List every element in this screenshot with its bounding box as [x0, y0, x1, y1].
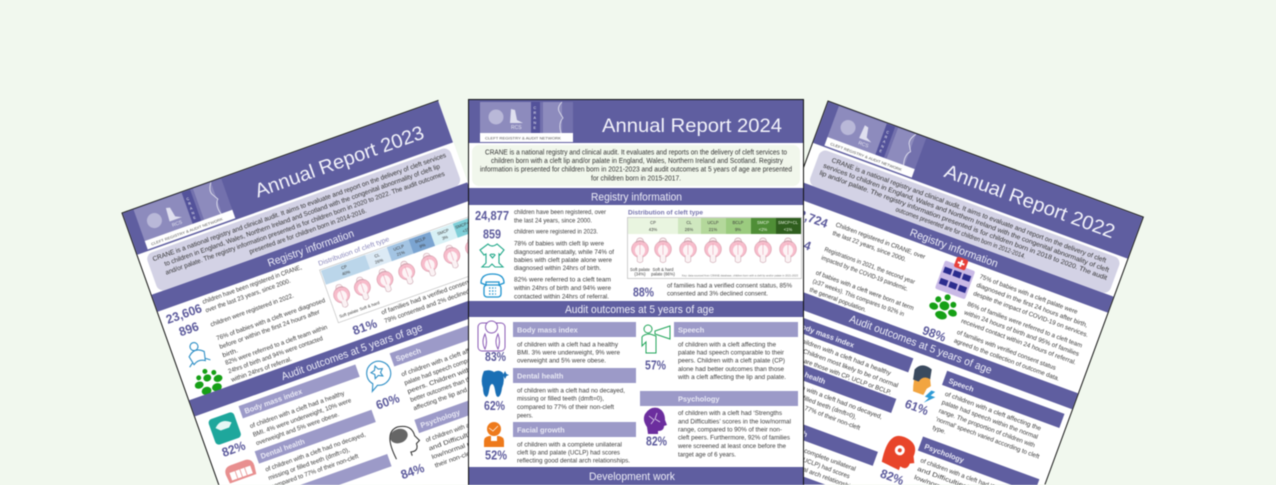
- stat 57%: 57%: [645, 358, 666, 372]
- registry stats right 2022: despite the impact of COVID-19 on services.: [972, 290, 1089, 339]
- psychology 2024: [640, 391, 798, 458]
- intro box 2024: [472, 145, 800, 186]
- intro box 2024: CRANE is a national registry and clinical audit. It evaluates and reports on the delivery of cleft services to: [485, 150, 787, 156]
- table: cleft types 2024: Key: data sourced from CRANE database, children born with a cleft lip and/or palate in 2021-2023: [682, 274, 799, 278]
- heading: distribution of cleft type 2024: Distribution of cleft type: [628, 210, 703, 216]
- table: cleft types 2024: BCLP: [733, 220, 744, 225]
- intro box 2022: services to children in England, Wales and Northern Ireland with the congenital abnormality of cleft: [822, 163, 1110, 274]
- facial growth 2024: cleft lip and palate (UCLP) had scores: [517, 450, 621, 456]
- psychology 2024: Psychology: [678, 394, 720, 404]
- speech 2024: of children with a cleft affecting the: [678, 342, 776, 348]
- psychology 2023: their non-cleft peers. Furthermore: [434, 429, 531, 469]
- table: cleft types 2024: CP: [650, 220, 656, 225]
- registry stats right 2022: 75% of babies with a cleft palate were: [978, 273, 1079, 316]
- icon: head with cog: [880, 432, 922, 474]
- body mass index 2022: [754, 305, 913, 400]
- body mass index 2022: Body mass index: [795, 320, 856, 350]
- speech 2022: 'normal' speech varied according to cleft: [935, 416, 1040, 461]
- logo 2023: E: [193, 215, 197, 220]
- logo 2022: CLEFT REGISTRY & AUDIT NETWORK: [830, 142, 903, 172]
- stat 52%: 52%: [485, 448, 507, 462]
- intro box 2024: children born with a cleft lip and/or palate in England, Wales, Northern Ireland and Scotland. Registry: [491, 158, 783, 165]
- registry stats left 2022: (≥37 weeks). This compares to 92% in: [812, 278, 905, 318]
- body mass index 2024: Body mass index: [517, 326, 579, 334]
- heading: audit outcomes 2022: Audit outcomes at 5 years of age: [848, 313, 993, 377]
- psychology 2023: low/normal range, compared to: [431, 421, 528, 461]
- registry stats 2023: children were registered in 2022.: [210, 292, 295, 329]
- stat 83%: 83%: [485, 350, 506, 364]
- logo 2023: RCS: [171, 219, 184, 229]
- registry stats 2023: 24hrs of birth and 94% were contacted: [227, 335, 324, 375]
- heading: audit outcomes 2024: Audit outcomes at 5 years of age: [565, 304, 714, 316]
- stat 82% bmi: 82%: [220, 439, 247, 460]
- icon: bathroom scale: [478, 321, 505, 351]
- registry stats 2023: before or within the first 24 hours after: [219, 309, 321, 351]
- body mass index 2024: BMI. 3% were underweight, 9% were: [517, 350, 620, 356]
- psychology 2022: [907, 436, 1039, 485]
- table: cleft types 2024: Soft palate: [630, 267, 651, 272]
- heading: registry information 2023: Registry information: [266, 228, 356, 270]
- facial growth 2024: Facial growth: [517, 426, 565, 434]
- registry stats 2023: 896: [177, 319, 201, 339]
- dental health 2022: [735, 346, 896, 449]
- registry stats left 2022: [803, 210, 926, 316]
- intro box 2024: for children born in 2015-2017.: [591, 176, 681, 182]
- psychology 2023: of children with a cleft had 'Strengths: [425, 404, 521, 444]
- dental health 2024: missing or filled teeth (dmft=0),: [517, 396, 604, 402]
- intro box 2022: CRANE is a national registry and clinical audit. It aims to evaluate and report on the delivery of cleft: [830, 157, 1107, 265]
- registry stats 2023: [166, 264, 328, 382]
- icon: babygrow: [480, 244, 504, 267]
- speech 2023: palate had speech comparable to their: [403, 345, 504, 387]
- intro box 2023: to children in England, Wales, Northern Ireland and Scotland with the congenital abnormality of cleft lip: [164, 163, 441, 268]
- speech 2023: of children with a cleft affecting the: [400, 338, 497, 378]
- facial growth 2022: Facial growth: [761, 414, 809, 439]
- logo 2023: CLEFT REGISTRY & AUDIT NETWORK: [151, 217, 224, 246]
- dental health 2024: Dental health: [517, 372, 564, 380]
- dental health 2022: peers.: [766, 401, 786, 414]
- logo 2022: A: [882, 140, 886, 144]
- psychology 2023: Psychology: [419, 407, 462, 430]
- speech 2024: peers. Children with a cleft palate (CP): [678, 358, 785, 364]
- speech 2022: palate had speech within the normal: [941, 399, 1039, 441]
- table: cleft types 2023: 40%: [341, 269, 351, 277]
- body mass index 2024: overweight and 5% were obese.: [517, 358, 606, 364]
- speech 2024: alone had better outcomes than those: [678, 366, 784, 373]
- table: cleft types 2023: 26%: [374, 257, 384, 265]
- table: cleft types 2024: <2%: [759, 227, 768, 232]
- registry stats right 2022: within 24 hours of birth and 95% of families: [962, 309, 1080, 358]
- icon: speech bubble star: [365, 360, 392, 394]
- table: cleft types 2023: BCLP: [414, 236, 427, 244]
- panel: Annual Report 2023: [120, 99, 469, 485]
- registry stats 2024: 24,877: [475, 209, 509, 223]
- consent stat 2023: of families had a verified consent status,: [380, 271, 491, 317]
- icon: tooth: [482, 370, 509, 397]
- intro box 2022: lip and/or palate. The registry information presented is for children born in 2018 to 2020. The audit: [818, 170, 1108, 282]
- registry band 2023: [152, 182, 473, 312]
- intro box 2022: outcomes presented are for children born in 2012-2014.: [894, 206, 1027, 261]
- development band: [469, 467, 803, 485]
- psychology 2023: and Difficulties' scores in the: [428, 412, 525, 452]
- body mass index 2023: overweight and 5% were obese.: [255, 411, 341, 447]
- logo 2022: N: [880, 144, 885, 149]
- registry stats 2023: children have been registered in CRANE,: [202, 264, 303, 306]
- icon: head with brain: [388, 425, 421, 460]
- speech 2024: Speech: [678, 326, 705, 334]
- table: cleft types 2023: 21%: [396, 250, 406, 257]
- body mass index 2023: [238, 364, 360, 446]
- psychology 2022: Psychology: [923, 442, 966, 465]
- body mass index 2022: weight are those with CP, UCLP or BCLP.: [784, 351, 892, 397]
- registry stats left 2022: 814: [789, 233, 813, 254]
- logo 2024: A: [534, 116, 536, 120]
- psychology 2024: range, compared to 90% of their non-: [678, 426, 782, 434]
- heading: audit outcomes 2023: Audit outcomes at 5 years of age: [280, 322, 424, 383]
- registry stats right 2022: agreed to the collection of outcome data.: [953, 337, 1061, 383]
- logo 2022: R: [884, 135, 888, 140]
- table: cleft types 2023: Soft palate: [338, 307, 360, 319]
- registry stats 2023: 82% were referred to a cleft team within: [224, 324, 329, 367]
- registry stats left 2022: of babies with a cleft were born at term: [815, 270, 915, 312]
- table: cleft types 2024: 43%: [649, 227, 657, 232]
- logo 2023: [134, 179, 235, 249]
- registry stats 2023: within 24hrs of referral.: [229, 356, 293, 384]
- dental health 2023: missing or filled teeth (dmft=0),: [267, 446, 351, 482]
- registry stats 2024: 82% were referred to a cleft team: [514, 276, 611, 284]
- consent stat 2024: consented and 3% declined consent.: [667, 290, 768, 298]
- facial growth 2022: [718, 399, 878, 485]
- logo 2024: C: [534, 106, 536, 110]
- registry stats 2024: the last 24 years, since 2000.: [514, 218, 592, 224]
- registry stats right 2022: of families with verified consent status: [956, 329, 1057, 372]
- table: cleft types 2024: 9%: [735, 227, 741, 232]
- table: cleft types 2024: <1%: [784, 227, 793, 232]
- heading: registry information 2022: Registry information: [908, 227, 1000, 270]
- registry band 2022: [793, 181, 1114, 313]
- table: cleft types 2024: SMCP+CL: [778, 220, 799, 225]
- logo 2024: R: [534, 111, 536, 115]
- logo 2023: A: [189, 206, 194, 211]
- icon: teeth: [223, 458, 257, 484]
- logo 2024: [480, 102, 573, 142]
- table: cleft types 2023: SMCP+CL: [454, 218, 475, 230]
- facial growth 2024: of children with a complete unilateral: [517, 442, 622, 448]
- facial growth 2022: cleft lip and palate (UCLP) had scores: [753, 439, 851, 480]
- speech 2023: Speech: [394, 346, 423, 363]
- consent stat 2023: [352, 280, 469, 336]
- speech 2022: type.: [931, 424, 947, 436]
- logo 2023: N: [191, 211, 195, 216]
- title 2022: Annual Report 2022: [941, 160, 1118, 243]
- body mass index 2022: BMI. Children most likely to be of normal: [788, 343, 899, 389]
- logo 2024: CLEFT REGISTRY & AUDIT NETWORK: [485, 136, 562, 140]
- consent stat 2023: 79% consented and 2% declined consent.: [384, 280, 494, 325]
- panel: Annual Report 2022: [803, 100, 1144, 485]
- dental health 2022: Dental health: [780, 362, 827, 386]
- registry stats 2023: over the last 23 years, since 2000.: [205, 278, 292, 314]
- registry stats left 2022: Children registered in CRANE, over: [835, 221, 926, 261]
- icon: telephone: [481, 274, 504, 297]
- title 2023: Annual Report 2023: [252, 122, 427, 202]
- heading: distribution of cleft type: Distribution of cleft type: [318, 236, 391, 268]
- speech 2023: better outcomes than those with a cleft: [409, 362, 510, 404]
- header band 2023: [123, 101, 453, 255]
- logo 2022: [824, 106, 926, 178]
- registry stats right 2022: 86% of families were referred to a cleft team: [966, 301, 1083, 350]
- table: cleft types 2023: <1%: [462, 226, 472, 234]
- body mass index 2022: of children with a cleft had a healthy: [791, 334, 893, 377]
- icon: person with megaphone: [642, 325, 670, 353]
- icon: medical building: [935, 256, 976, 300]
- psychology 2024: and Difficulties’ scores in the low/normal: [678, 418, 791, 426]
- table: cleft types 2024: 21%: [709, 227, 717, 232]
- body mass index 2023: of children with a cleft had a healthy: [249, 390, 346, 430]
- intro box 2023: presented are for children born in 2014-2016.: [248, 208, 368, 256]
- logo 2022: E: [879, 149, 883, 154]
- title 2024: Annual Report 2024: [602, 115, 782, 137]
- table: cleft types 2024: (34%): [634, 272, 646, 276]
- development band 2022: [697, 440, 825, 485]
- body mass index 2023: Body mass index: [243, 386, 304, 416]
- table: cleft types 2023: CP: [340, 264, 348, 270]
- icon: green group: [928, 294, 958, 320]
- dental health 2024: [513, 368, 636, 420]
- psychology 2024: were screened at least once before the: [677, 443, 786, 450]
- audit band 2024: [469, 301, 803, 317]
- speech 2024: [674, 322, 798, 381]
- heading: development work: Development work: [589, 471, 676, 483]
- logo 2024: RCS: [511, 125, 522, 131]
- facial growth bar 2023: [300, 454, 392, 485]
- consent stat 2024: 88%: [633, 286, 654, 300]
- psychology 2024: target age of 6 years.: [678, 452, 736, 458]
- speech 2022: Speech: [947, 376, 976, 394]
- dental health 2024: peers.: [517, 412, 533, 420]
- registry stats 2024: 78% of babies with cleft lip were: [514, 240, 604, 248]
- registry stats 2023: 23,606: [164, 301, 204, 327]
- registry stats 2024: diagnosed within 24hrs of birth.: [514, 265, 601, 272]
- dental health 2024: compared to 77% of their non-cleft: [517, 404, 614, 411]
- table: cleft types 2023: UCLP: [393, 243, 405, 252]
- logo 2023: R: [188, 201, 192, 206]
- dental health 2022: compared to 77% of their non-cleft: [769, 393, 861, 432]
- table: cleft types 2023: 3%: [441, 234, 449, 241]
- table: cleft types 2024: UCLP: [707, 220, 719, 225]
- psychology 2024: cleft peers. Furthermore, 92% of families: [678, 434, 791, 442]
- panel: Annual Report 2024: [468, 99, 804, 485]
- registry stats 2024: children were registered in 2023.: [514, 228, 598, 236]
- intro box 2022: [808, 149, 1121, 295]
- icon: baby: [188, 341, 212, 368]
- icon: teal scale: [208, 411, 242, 446]
- registry stats right 2022: received contact within 24 hours of referral.: [960, 318, 1077, 367]
- table: cleft types 2023: CL: [374, 252, 381, 259]
- speech 2022: [926, 371, 1064, 472]
- stat 60%: 60%: [374, 391, 401, 412]
- audit band 2023: [188, 300, 469, 417]
- dental health 2023: [255, 410, 386, 485]
- stat 61%: 61%: [903, 397, 930, 418]
- consent stat 2023: 81%: [351, 316, 379, 338]
- registry stats right 2022: [953, 274, 1088, 382]
- registry stats left 2022: the last 22 years, since 2000.: [831, 230, 907, 264]
- table: cleft types 2023: Soft & hard: [359, 300, 381, 312]
- registry stats 2024: babies with cleft palate alone were: [514, 257, 612, 264]
- table: cleft types 2024: Soft & hard: [653, 267, 674, 272]
- registry stats 2023: birth.: [222, 347, 239, 359]
- icon: face with zap: [905, 363, 944, 406]
- dental health 2024: of children with a cleft had no decayed,: [517, 388, 625, 394]
- speech 2023: [389, 325, 469, 411]
- registry stats left 2022: the general population.: [808, 287, 867, 314]
- speech 2024: palate had speech comparable to their: [678, 350, 785, 356]
- icon: green people: [194, 368, 224, 396]
- dental health 2023: Dental health: [259, 437, 306, 461]
- logo 2022: RCS: [857, 140, 870, 150]
- heading: registry information 2024: Registry information: [591, 192, 682, 204]
- logo 2022: C: [886, 130, 890, 135]
- facial growth 2022: of children with a complete unilateral: [756, 430, 857, 473]
- dental health 2023: of children with a cleft had no decayed,: [264, 431, 367, 474]
- registry stats left 2022: 22,724: [790, 205, 830, 231]
- registry stats right 2022: diagnosed in the first 24 hours after birth,: [975, 282, 1089, 329]
- registry stats 2024: 859: [483, 228, 501, 242]
- speech 2023: peers. Children with a CP had: [406, 355, 504, 395]
- intro box 2023: and/or palate. The registry information presented is for children born in 2020 to 2022. The audit outcomes: [165, 170, 446, 277]
- logo 2024: N: [534, 121, 536, 125]
- table: cleft types 2023: SMCP: [436, 227, 450, 236]
- dental health 2022: missing or filled teeth (dmft=0),: [773, 384, 858, 421]
- registry stats left 2022: impacted by the COVID-19 pandemic.: [820, 255, 909, 293]
- intro box 2023: CRANE is a national registry and clinical audit. It aims to evaluate and report on the delivery of cleft services: [152, 152, 448, 263]
- registry stats 2023: 76% of babies with a cleft were diagnosed: [216, 297, 327, 342]
- registry band 2024: [469, 188, 803, 205]
- intro box 2024: information is presented for children born in 2021-2023 and audit outcomes at 5 years of age are presented: [480, 166, 792, 174]
- consent stat 2024: of families had a verified consent status, 85%: [667, 282, 792, 290]
- stat 84%: 84%: [399, 461, 426, 482]
- speech 2024: with a cleft affecting the lip and palate.: [677, 374, 786, 381]
- logo 2024: E: [534, 126, 536, 130]
- facial growth 2024: reflecting good dental arch relationships.: [517, 458, 630, 464]
- audit band 2022: [803, 292, 1078, 410]
- stat 62%: 62%: [484, 399, 505, 413]
- registry stats 2024: diagnosed antenatally, while 74% of: [514, 249, 614, 256]
- table: cleft types 2023: [319, 216, 469, 324]
- header band 2022: [813, 102, 1143, 259]
- stat 82%: 82%: [646, 434, 667, 448]
- speech 2022: of children with a cleft affecting the: [944, 391, 1042, 433]
- consent stat 2024: [633, 282, 792, 300]
- registry stats 2024: within 24hrs of birth and 94% were: [513, 285, 611, 292]
- header band 2024: [469, 100, 803, 143]
- psychology 2023: [414, 400, 469, 468]
- registry stats 2024: contacted within 24hrs of referral.: [514, 294, 609, 300]
- table: cleft types 2024: 26%: [685, 227, 693, 232]
- registry stats 2024: [475, 209, 614, 300]
- body mass index 2023: BMI. 4% were underweight, 10% were: [252, 397, 353, 439]
- table: cleft types 2024: SMCP: [757, 220, 769, 225]
- psychology 2024: of children with a cleft had ‘Strengths: [678, 410, 783, 417]
- body mass index 2024: of children with a cleft had a healthy: [517, 342, 619, 348]
- table: cleft types 2024: [628, 218, 802, 278]
- table: cleft types 2023: 9%: [419, 242, 426, 249]
- icon: purple head: [644, 408, 667, 434]
- registry stats 2024: children have been registered, over: [514, 209, 607, 216]
- logo 2023: C: [186, 197, 190, 201]
- body mass index 2024: [513, 322, 636, 364]
- table: cleft types 2024: palate (66%): [651, 272, 675, 276]
- table: cleft types 2024: CL: [686, 220, 692, 225]
- speech 2022: range. The proportion of children with: [938, 408, 1036, 449]
- dental health 2022: of children with a cleft had no decayed,: [776, 376, 883, 421]
- registry stats left 2022: Registrations in 2021, the second year: [823, 246, 916, 286]
- speech 2023: affecting the lip and palate.: [412, 379, 489, 412]
- stat 98%: 98%: [920, 323, 948, 345]
- icon: orange person: [484, 422, 504, 447]
- facial growth 2024: [513, 422, 636, 464]
